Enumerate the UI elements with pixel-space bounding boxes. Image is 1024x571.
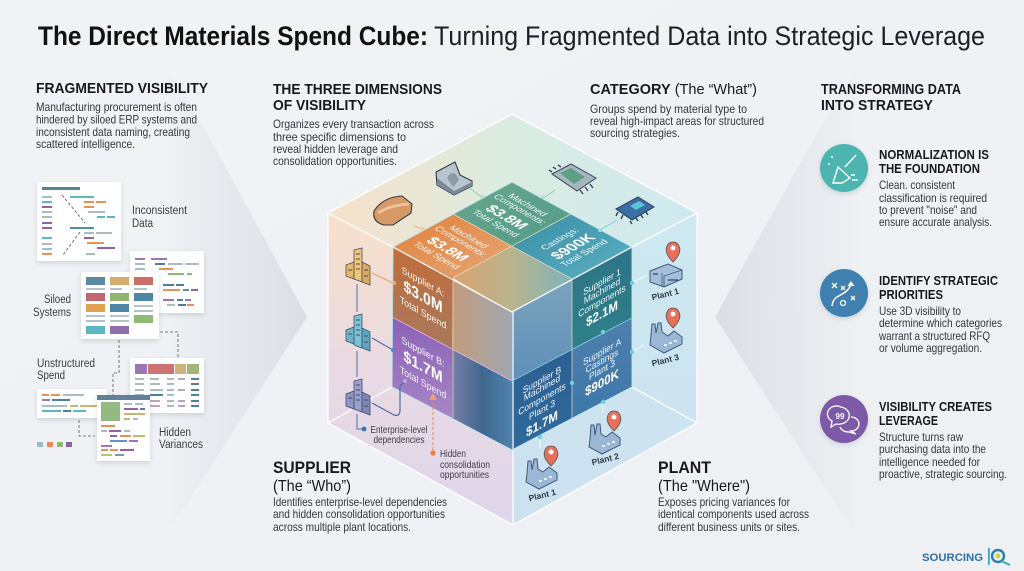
heading: transforming data: TRANSFORMING DATA [821,81,961,98]
text block: visibility creates leverage: purchasing data into the [879,442,986,456]
title [38,21,985,51]
panel: fragmented visibility [33,80,208,461]
top tile: center [453,246,572,312]
right face: supplier B machined components plant 3: Components [518,380,566,418]
document: unstructured spend [37,389,107,418]
icon: plant 2 lower: Plant 2 [591,451,620,467]
text block: plant: PLANT [658,458,712,477]
text block: strategic priorities: determine which categories [879,316,1002,330]
text block: category: sourcing strategies. [590,126,680,140]
connector lines between documents [79,332,178,436]
top tile: castings teal [512,214,632,279]
text block: strategic priorities: Use 3D visibility to [879,304,961,318]
left chevron backdrop [165,65,307,537]
left face: supplier B [392,317,452,418]
text block: three dimensions: Organizes every transaction across [273,117,434,131]
callout: hidden consolidation opportunities: opportunities [440,470,489,481]
right face: upper inner [512,279,572,381]
text block: supplier: Identifies enterprise-level dependencies [273,495,447,509]
text block: normalization: to prevent "noise" and [879,203,977,217]
top tile: machined components orange: Machined [446,224,491,250]
outer cube faces [328,114,697,525]
icon: strategy play [820,269,868,317]
text block: supplier: across multiple plant locations. [273,520,411,534]
text block: category: Groups spend by material type to [590,102,747,116]
label: inconsistent data [132,205,188,230]
icon: building supplier A [346,248,370,285]
icon: speech bubbles [820,395,868,443]
text block: strategic priorities [878,273,1002,355]
icon: gray part [436,162,472,195]
top tile: machined components green: Machined [505,192,550,218]
label: siloed systems [33,294,71,319]
connectors: parts to tiles [414,188,617,232]
text block: plant: Exposes pricing variances for [658,495,790,509]
icon: plant 1 lower: Plant 1 [528,487,557,503]
label: siloed systems: Siloed [44,294,71,306]
document: hidden variances [97,395,150,461]
right face: supplier 1 machined components: Machined [584,276,620,307]
heading: transforming data [821,81,961,114]
label: unstructured spend [37,358,95,382]
icon: building supplier B [346,379,370,415]
right face: supplier B machined components plant 3: Supplier B [523,364,561,397]
right face: supplier B machined components plant 3 [512,349,572,450]
text block: visibility creates leverage: intelligence needed for [879,455,980,469]
top tile: machined components green: Total Spend [468,208,522,239]
left face: supplier A [392,247,453,349]
text block: visibility creates leverage: Structure turns raw [879,430,963,444]
callout: hidden consolidation opportunities: Hidden [440,449,466,460]
text block: strategic priorities: PRIORITIES [879,287,943,302]
top tile: machined components green: $3.8M [481,203,532,232]
text block: supplier [273,458,447,534]
top tile: castings teal: $900K [547,231,600,262]
left face: supplier B: Supplier B: [402,335,444,370]
text block: fragmented intro: inconsistent data naming, creating [36,125,190,139]
text block: fragmented intro: scattered intelligence. [36,137,135,151]
top tile: machined components orange: $3.8M [422,235,473,264]
text block: plant: (The "Where") [658,478,750,495]
title: The Direct Materials Spend Cube: [38,21,428,51]
top tile: machined components green [453,182,571,246]
text block: fragmented intro: hindered by siloed ERP systems and [36,112,197,126]
icon: plant 1 lower [526,446,558,503]
text block: fragmented intro [36,100,197,151]
text block: visibility creates leverage: VISIBILITY CREATES [879,399,992,414]
text block: visibility creates leverage [879,399,1007,481]
right face: supplier A castings plant 3: Plant 3 [589,358,615,383]
callout: hidden consolidation opportunities [429,393,490,481]
top tile: machined components orange: Components: [431,225,490,259]
top tile: castings teal: Total Spend [558,238,611,269]
left face: supplier A: Total Spend [400,295,446,332]
text block: normalization: classification is required [879,191,987,205]
left face: supplier B: Total Spend [400,365,446,402]
text block: three dimensions: THE THREE DIMENSIONS [273,81,442,98]
document: inconsistent data [37,182,121,261]
left face: supplier A: Supplier A: [402,265,444,300]
text block: supplier: SUPPLIER [273,458,351,477]
text block: plant [658,458,809,534]
cube edges [328,114,697,525]
label: unstructured spend: Spend [37,370,65,382]
logo: sourcing: SOURCING [922,552,983,564]
text block: strategic priorities: warrant a structured RFQ [878,329,990,343]
text block: plant: identical components used across [658,507,809,521]
text block: three dimensions [273,81,442,168]
callout: enterprise-level dependencies: Enterprise-level [370,425,428,436]
document: siloed systems [81,272,159,339]
text block: plant: different business units or sites. [658,520,800,534]
icon: plant 3 upper: Plant 3 [651,352,680,368]
text block: category [590,81,764,140]
right face: supplier 1 machined components: Components [578,282,626,320]
icon: plant 2 lower [589,411,621,467]
heading: fragmented visibility: FRAGMENTED VISIBILITY [36,80,208,97]
label: unstructured spend: Unstructured [37,358,95,370]
icon: bracket part [374,196,412,225]
spend cube [328,114,697,525]
label: hidden variances [159,427,203,451]
text block: three dimensions: three specific dimensions to [273,130,406,144]
text block: normalization [879,147,992,229]
left face: upper center [452,279,512,381]
text block: category: reveal high-impact areas for structured [590,114,764,128]
title: Turning Fragmented Data into Strategic Leverage [434,21,985,51]
right face: supplier A castings plant 3: $900K [585,365,619,400]
right face: supplier A castings plant 3 [572,318,632,418]
icon: plant 1 upper: Plant 1 [651,286,680,302]
panel: transforming data into strategy [820,81,1007,481]
callout: enterprise-level dependencies: dependencies [374,435,424,446]
text block: normalization: THE FOUNDATION [879,161,980,176]
text block: normalization: ensure accurate analysis. [879,215,992,229]
label: inconsistent data: Data [132,218,154,230]
icon: building supplier middle [346,314,370,351]
right face: supplier A castings plant 3: Supplier A [583,336,622,369]
heading: transforming data: INTO STRATEGY [821,97,933,114]
logo: sourcing [922,548,1010,565]
left face: lower center [452,349,512,450]
right face: supplier B machined components plant 3: Machined [524,373,560,404]
label: siloed systems: Systems [33,307,71,319]
text block: normalization: NORMALIZATION IS [879,147,989,162]
document: back system table [130,251,204,313]
callout: hidden consolidation opportunities: consolidation [440,460,490,471]
icon: plant 1 upper [650,242,682,302]
text block: strategic priorities: or volume aggregation. [879,341,982,355]
connectors: faces to plants [538,275,647,448]
left face: supplier A: $3.0M [403,277,443,317]
callout: enterprise-level dependencies [362,425,428,446]
top tile: castings teal: Castings: [538,227,582,252]
text block: category: CATEGORY (The “What”) [590,81,757,98]
text block: fragmented intro: Manufacturing procurement is often [36,100,197,114]
text block: supplier: (The “Who”) [273,478,351,495]
icon: broom [820,144,868,192]
top tile: machined components green: Components: [490,193,549,227]
top tile: machined components orange [393,214,512,278]
text block: strategic priorities: IDENTIFY STRATEGIC [879,273,999,288]
top tile: machined components orange: Total Spend [409,240,463,271]
arrows: supplier links [357,273,407,429]
right face: supplier 1 machined components: $2.1M [586,297,618,330]
right face: supplier 1 machined components [572,247,632,349]
text block: visibility creates leverage: LEVERAGE [879,413,938,428]
right face: supplier A castings plant 3: Castings [586,347,618,376]
text block: three dimensions: OF VISIBILITY [273,97,366,114]
icon: circuit chip [549,164,596,194]
right chevron backdrop [715,65,859,537]
right face: supplier B machined components plant 3: Plant 3 [529,398,555,423]
label: inconsistent data: Inconsistent [132,205,188,217]
text block: normalization: Clean. consistent [879,178,956,192]
text block: supplier: and hidden consolidation opportunities [273,507,445,521]
icon: plant 3 upper [650,308,682,368]
document: hidden variance table [130,358,204,413]
text block: three dimensions: consolidation opportunities. [273,154,397,168]
text block: three dimensions: reveal hidden leverage and [273,142,398,156]
icon: speech bubbles: 99 [836,412,845,421]
right face: supplier 1 machined components: Supplier 1 [583,266,621,299]
right face: supplier B machined components plant 3: $1.7M [526,407,558,440]
legend swatches [37,442,72,447]
left face: supplier B: $1.7M [403,347,443,387]
icon: blue chip [616,197,654,224]
label: hidden variances: Hidden [159,427,191,439]
label: hidden variances: Variances [159,439,203,451]
